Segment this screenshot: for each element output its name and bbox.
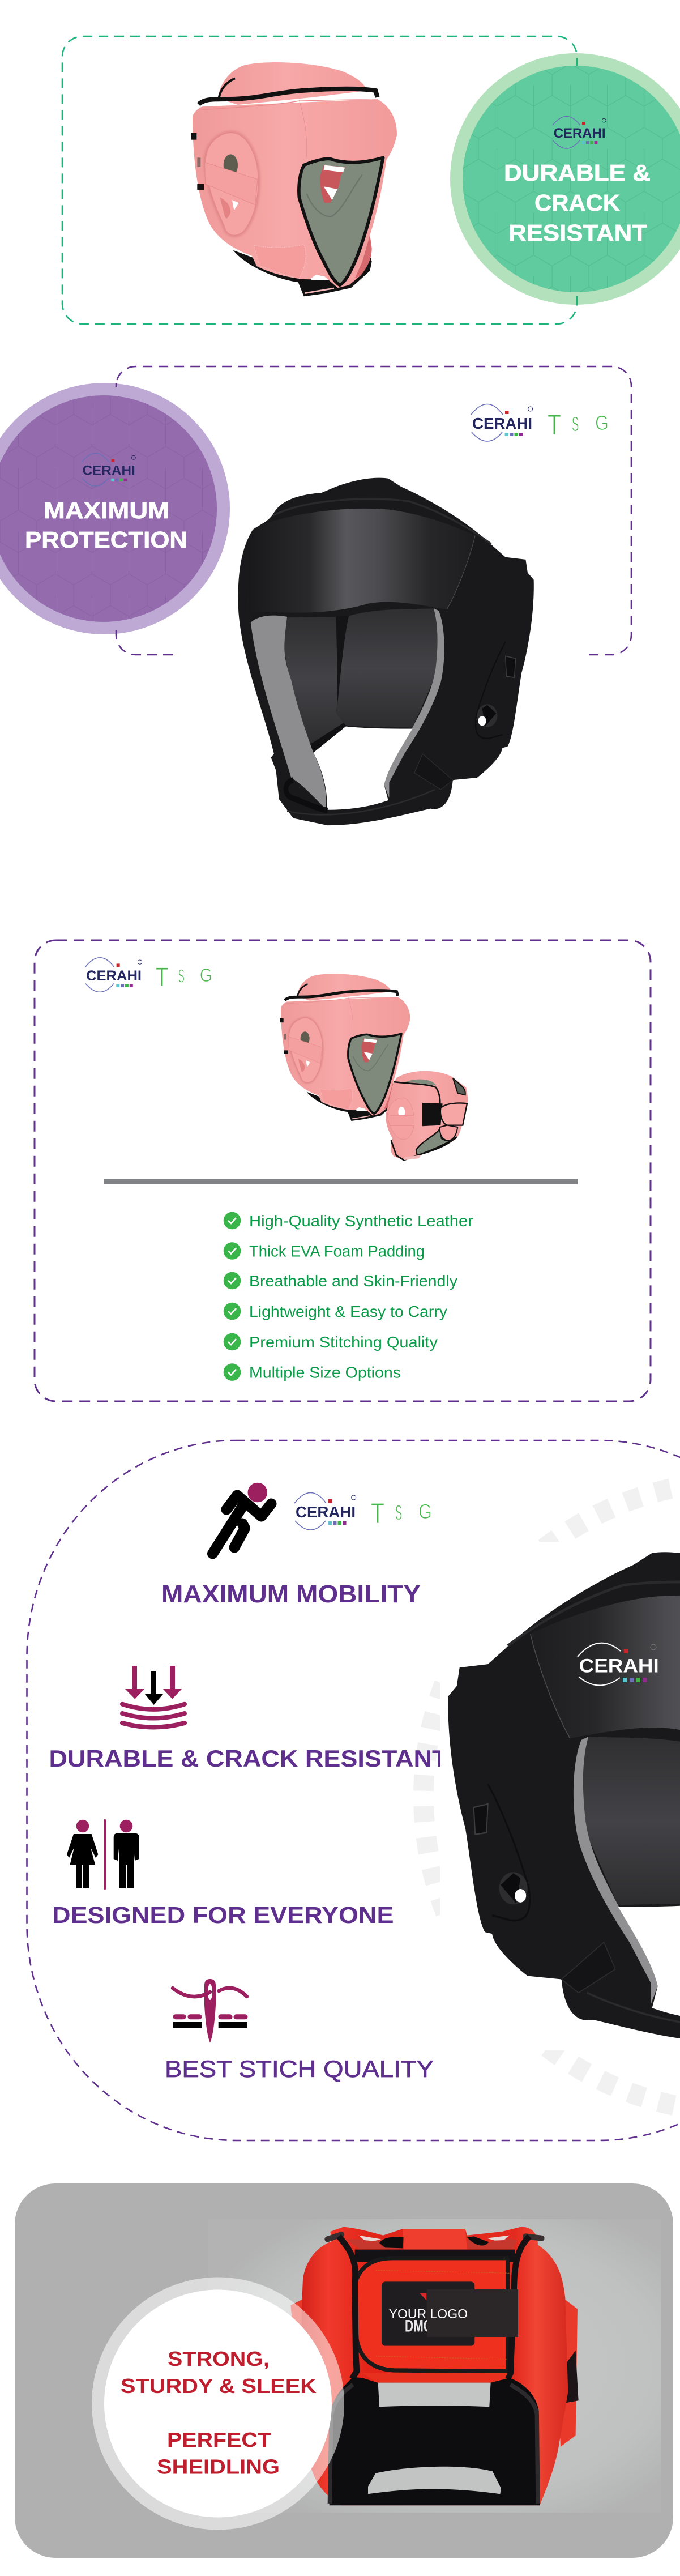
callout text: STRONG,	[168, 2347, 270, 2370]
grey rounded background	[15, 2183, 673, 2558]
heading: maximum protection	[25, 497, 187, 553]
heading: maximum mobility: MAXIMUM MOBILITY	[161, 1580, 421, 1608]
red head guard, back view	[290, 2227, 579, 2505]
logo with TSG mark: CERAHI	[472, 415, 532, 432]
logo with TSG mark: G	[418, 1500, 432, 1523]
callout text: STURDY & SLEEK	[121, 2374, 317, 2398]
heading: durable and crack resistant: RESISTANT	[508, 220, 647, 246]
icon: runner	[213, 1483, 271, 1554]
item: stitching: Premium Stitching Quality	[249, 1333, 438, 1351]
purple ring	[0, 383, 230, 634]
logo with TSG mark: T	[548, 409, 561, 441]
item: synthetic leather: High-Quality Synthetic Leather	[249, 1212, 473, 1230]
feature list	[224, 1212, 473, 1381]
pink head guard, back view	[386, 1071, 468, 1160]
callout text	[121, 2347, 317, 2479]
logo with TSG mark: G	[595, 411, 609, 434]
divider bar	[104, 1179, 578, 1184]
heading: durable and crack resistant	[504, 160, 651, 246]
green disc	[463, 66, 680, 292]
heading: designed for everyone: DESIGNED FOR EVERYONE	[52, 1902, 394, 1928]
grey dashed ring behind helmet	[424, 1481, 680, 2112]
logo in green disc: CERAHI	[554, 126, 606, 141]
pink head guard photo	[191, 62, 397, 296]
heading: durable and crack resistant: CRACK	[534, 190, 620, 216]
lighter photo backdrop	[208, 2219, 661, 2513]
label text on helmet: YOUR LOGO	[389, 2306, 468, 2321]
callout text: SHEIDLING	[157, 2455, 280, 2479]
callout text: PERFECT	[167, 2428, 271, 2451]
panel: durable and crack resistant	[62, 36, 680, 324]
panel: product features checklist	[35, 940, 651, 1401]
logo with TSG mark: S	[178, 966, 185, 987]
logo with TSG mark: T	[156, 962, 168, 992]
item: sizes: Multiple Size Options	[249, 1364, 401, 1381]
green ring	[450, 53, 680, 305]
panel: maximum protection	[0, 366, 631, 825]
logo with TSG mark	[294, 1493, 432, 1530]
logo with TSG mark: S	[572, 412, 579, 436]
icon: pressure layers	[122, 1666, 185, 1728]
pink head guard, side view	[280, 974, 410, 1121]
white disc	[104, 2289, 332, 2517]
logo with TSG mark: CERAHI	[296, 1503, 356, 1521]
purple dashed rounded frame	[27, 1440, 680, 2140]
white logo on helmet: CERAHI	[579, 1655, 659, 1677]
panel: benefits with black head guard	[27, 1440, 680, 2140]
heading: maximum protection: PROTECTION	[25, 527, 187, 553]
logo with TSG mark	[471, 404, 609, 441]
green dashed frame	[62, 36, 577, 324]
heading: durable and crack resistant: DURABLE & CRACK RESISTANT	[49, 1745, 448, 1772]
purple disc	[0, 395, 217, 622]
black head guard, mirrored close-up	[448, 1552, 680, 2044]
black head guard photo	[238, 478, 534, 825]
item: breathable: Breathable and Skin-Friendly	[249, 1272, 457, 1290]
heading: maximum protection: MAXIMUM	[44, 497, 169, 523]
purple dashed frame	[116, 366, 631, 655]
icon: needle and stitches	[173, 1979, 247, 2043]
logo with TSG mark: CERAHI	[86, 968, 142, 984]
logo with TSG mark: S	[395, 1501, 402, 1524]
white photo backdrop	[440, 1542, 680, 2050]
logo with TSG mark: T	[371, 1498, 384, 1530]
translucent ring	[92, 2277, 344, 2530]
logo with TSG mark: G	[200, 965, 212, 986]
logo in purple disc	[82, 453, 135, 486]
item: foam padding: Thick EVA Foam Padding	[249, 1243, 425, 1260]
panel: strong, sturdy and sleek	[15, 2183, 673, 2558]
purple dashed frame	[35, 940, 651, 1401]
heading: best stich quality: BEST STICH QUALITY	[165, 2055, 434, 2082]
label text on helmet: DMC	[405, 2317, 432, 2336]
white logo on helmet	[578, 1643, 659, 1686]
icon: woman and man	[67, 1819, 139, 1890]
heading: durable and crack resistant: DURABLE &	[504, 160, 651, 186]
logo in purple disc: CERAHI	[83, 463, 135, 479]
label text on helmet	[389, 2289, 518, 2337]
logo in green disc	[553, 116, 606, 148]
logo with TSG mark	[85, 958, 212, 992]
item: lightweight: Lightweight & Easy to Carry	[249, 1303, 447, 1320]
